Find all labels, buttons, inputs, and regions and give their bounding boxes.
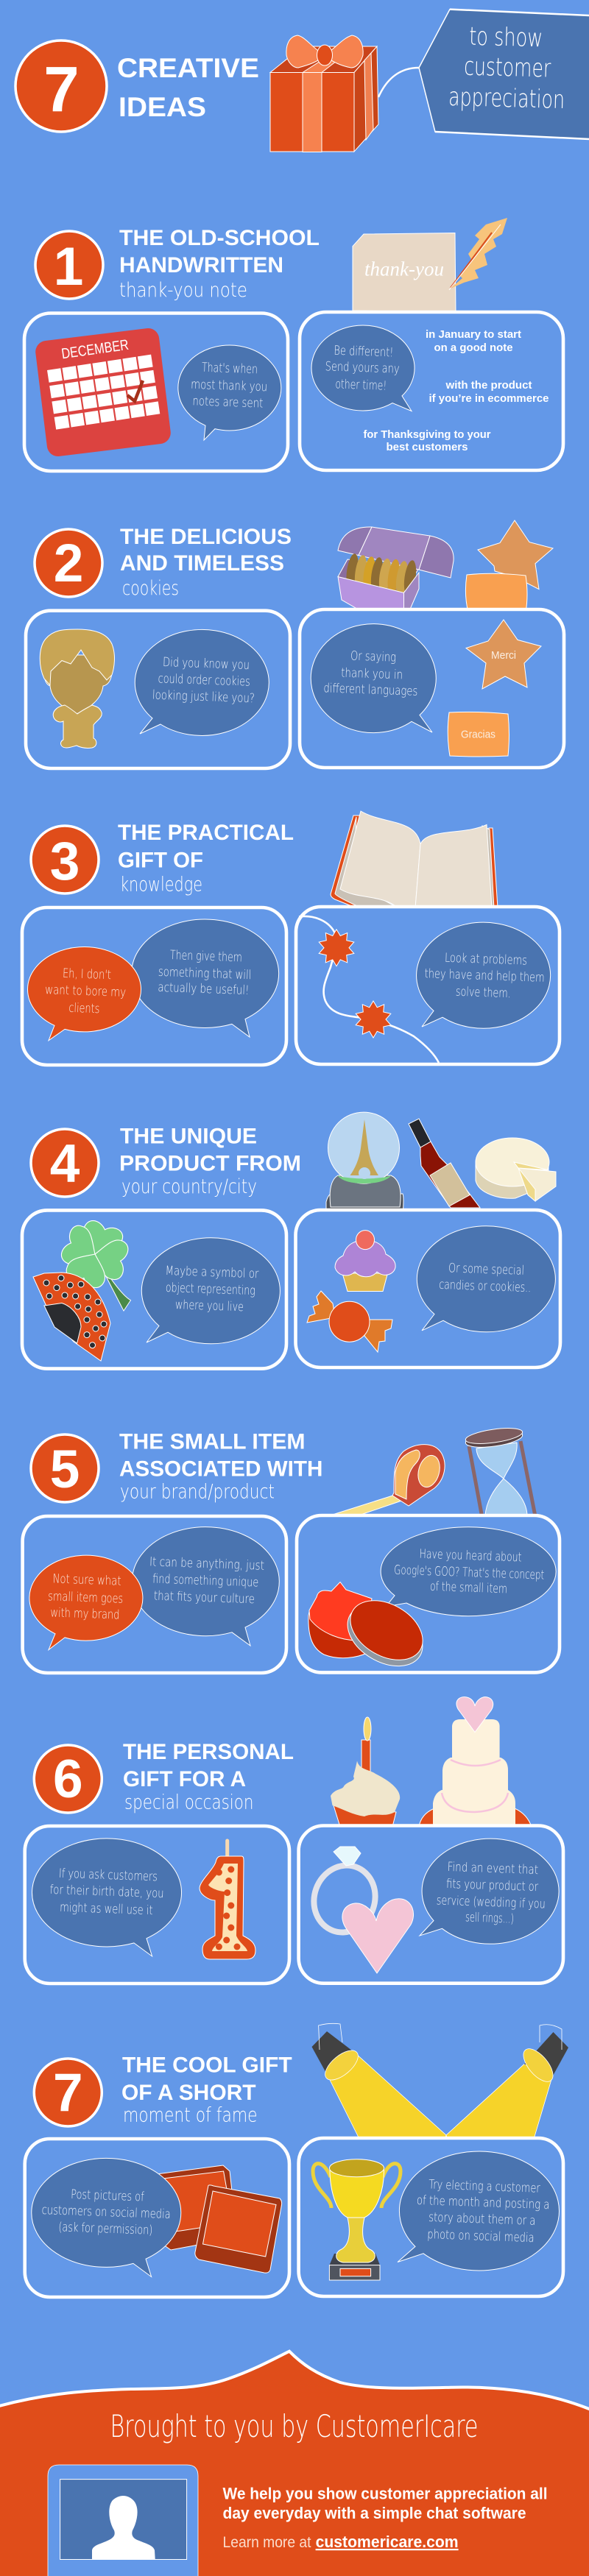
- panel: social media pictures: [25, 2139, 289, 2297]
- section 7: moment of fame: [25, 2023, 568, 2297]
- speech bubble: might as well use it: [60, 1900, 153, 1918]
- list of occasions: [364, 328, 549, 453]
- speech bubble: blue: [132, 919, 279, 1037]
- speech bubble: [417, 1226, 555, 1332]
- speech bubble: Or saying: [350, 648, 396, 665]
- speech bubble: [141, 1238, 280, 1344]
- icon: wine bottle: [409, 1119, 480, 1208]
- speech bubble: Look at problems: [445, 951, 527, 969]
- heading 1: THE OLD-SCHOOL: [119, 226, 320, 250]
- number badge 5: [31, 1434, 99, 1502]
- speech bubble: [420, 1839, 559, 1944]
- icon: birthday cupcake: [331, 1717, 400, 1827]
- section 6: personal gift: [25, 1697, 563, 1984]
- speech bubble: of the month and posting a: [417, 2193, 550, 2212]
- number badge 2: 2: [54, 534, 83, 593]
- heading 3: THE PRACTICAL: [118, 821, 294, 845]
- speech bubble: [311, 624, 436, 733]
- panel: customer of the month: [299, 2138, 563, 2296]
- tag: to show customer appreciation: to show: [469, 22, 543, 53]
- panel: small item: [23, 1516, 286, 1673]
- header number badge: [15, 40, 107, 132]
- speech bubble: candies or cookies..: [439, 1278, 532, 1295]
- icon: four-leaf clover: [58, 1217, 131, 1311]
- number badge 2: [35, 529, 102, 597]
- heading 2: [120, 525, 292, 600]
- path with milestones: [299, 916, 439, 1063]
- speech bubble: orange: Eh, I don't: [63, 966, 111, 983]
- icon: photo frames: [151, 2165, 282, 2273]
- heading 1: thank-you note: [119, 279, 247, 302]
- icon: person silhouette: [92, 2496, 155, 2559]
- speech bubble: fits your product or: [446, 1877, 538, 1894]
- speech bubble: Did you know you: [163, 655, 250, 673]
- speech bubble: Try electing a customer: [428, 2177, 540, 2196]
- speech bubble: orange: clients: [68, 1001, 100, 1016]
- panel: candies: [296, 1210, 560, 1367]
- panel: birth date: [25, 1826, 289, 1984]
- speech bubble: blue: [132, 1527, 279, 1646]
- speech bubble: other time!: [335, 377, 387, 394]
- section 5: small item: [23, 1426, 560, 1679]
- speech bubble: That's when: [202, 361, 258, 377]
- profile card: [48, 2465, 198, 2576]
- speech bubble: solve them.: [456, 985, 511, 1001]
- header number badge: 7: [43, 54, 80, 125]
- speech bubble: Find an event that: [447, 1860, 538, 1878]
- speech bubble: customers on social media: [41, 2203, 171, 2222]
- panel: other times to send: [300, 312, 563, 470]
- icon: star cookie: [478, 520, 553, 590]
- list of occasions: if you’re in ecommerce: [428, 392, 549, 405]
- speech bubble: of the small item: [430, 1579, 507, 1596]
- heading 5: your brand/product: [120, 1481, 275, 1504]
- number badge 5: 5: [50, 1440, 80, 1499]
- icon: wrapped candy: [307, 1291, 392, 1352]
- panel: google goo: [297, 1515, 560, 1679]
- speech bubble: orange: with my brand: [50, 1605, 120, 1623]
- number badge 1: [35, 231, 103, 299]
- icon: cheese: [476, 1138, 556, 1201]
- heading 6: [123, 1740, 294, 1814]
- speech bubble: [32, 1839, 182, 1956]
- icon: snow globe: [326, 1112, 403, 1214]
- call to action text: day everyday with a simple chat software: [222, 2504, 526, 2522]
- number badge 7: 7: [53, 2063, 83, 2123]
- icon: thank-you card: [353, 233, 456, 312]
- speech bubble: blue: actually be useful!: [158, 980, 250, 998]
- speech bubble: could order cookies: [158, 671, 250, 690]
- icon: calendar: DECEMBER: [60, 337, 130, 362]
- speech bubble: [381, 1527, 556, 1616]
- tag: to show customer appreciation: customer: [464, 52, 551, 84]
- heading 6: THE PERSONAL: [123, 1740, 294, 1764]
- speech bubble: blue: find something unique: [152, 1571, 258, 1590]
- speech bubble: photo on social media: [427, 2227, 535, 2246]
- icon: measuring tape: [333, 1445, 445, 1515]
- heading 7: THE COOL GIFT: [122, 2053, 292, 2078]
- speech bubble: [135, 629, 269, 735]
- speech bubble: Maybe a symbol or: [165, 1264, 259, 1281]
- icon: trophy: [313, 2159, 401, 2280]
- number badge 3: [31, 826, 99, 894]
- speech bubble: most thank you: [191, 378, 267, 394]
- call to action text: We help you show customer appreciation all: [222, 2485, 548, 2502]
- panel: special event: [299, 1825, 563, 1984]
- panel: local symbol: [22, 1210, 286, 1369]
- footer: [0, 2352, 589, 2576]
- main title: CREATIVE: [117, 53, 259, 83]
- section 3: knowledge: [22, 811, 560, 1065]
- section 2: cookies: [26, 520, 564, 768]
- heading 4: PRODUCT FROM: [119, 1152, 301, 1176]
- panel: cookies looking like you: [26, 611, 290, 768]
- speech bubble: thank you in: [341, 666, 403, 682]
- panel: bore my clients: [22, 907, 286, 1065]
- icon: boy cookie: [40, 629, 114, 748]
- icon: spanish fan: [33, 1273, 110, 1361]
- icon: number one candle: [200, 1841, 255, 1959]
- square: Gracias: [448, 712, 509, 757]
- heading 2: THE DELICIOUS: [120, 525, 292, 549]
- number badge 1: 1: [54, 237, 83, 297]
- speech bubble: they have and help them: [424, 966, 545, 986]
- heading 1: HANDWRITTEN: [119, 253, 283, 277]
- number badge 4: 4: [50, 1134, 80, 1194]
- panel: different languages: [300, 609, 564, 768]
- speech bubble: (ask for permission): [58, 2220, 153, 2238]
- list of occasions: on a good note: [434, 342, 512, 354]
- icon: spotlights: [312, 2023, 568, 2140]
- icon: red tin: [308, 1582, 434, 1679]
- speech bubble: Have you heard about: [419, 1547, 522, 1565]
- heading 4: [119, 1124, 301, 1198]
- speech bubble: orange: [29, 1555, 143, 1650]
- number badge 6: [34, 1745, 102, 1813]
- icon: diamond ring: [305, 1847, 384, 1941]
- heading 7: moment of fame: [123, 2103, 258, 2126]
- section 1: handwritten note: [24, 218, 563, 471]
- tag string: [378, 68, 419, 97]
- icon: calendar: [35, 327, 172, 458]
- icon: gift box: [270, 35, 378, 152]
- speech bubble: If you ask customers: [59, 1866, 158, 1884]
- panel: solve problems: [296, 907, 560, 1064]
- icon: cookie box: [338, 527, 454, 611]
- speech bubble: where you live: [175, 1298, 244, 1314]
- speech bubble: object representing: [166, 1281, 255, 1298]
- heading 3: [118, 821, 294, 896]
- speech bubble: looking just like you?: [152, 688, 255, 706]
- speech bubble: blue: something that will: [158, 965, 252, 983]
- speech bubble: story about them or a: [428, 2210, 536, 2229]
- main title: [117, 53, 259, 122]
- number badge 4: [31, 1129, 99, 1197]
- heading 7: OF A SHORT: [121, 2081, 256, 2105]
- speech bubble: [32, 2158, 181, 2277]
- icon: heart: [342, 1899, 414, 1973]
- number badge 7: [34, 2059, 102, 2126]
- speech bubble: [311, 325, 415, 411]
- list of occasions: best customers: [386, 441, 468, 453]
- speech bubble: Send yours any: [325, 359, 400, 377]
- speech bubble: orange: Not sure what: [52, 1571, 121, 1589]
- heading 5: THE SMALL ITEM: [119, 1430, 305, 1454]
- list of occasions: for Thanksgiving to your: [364, 428, 491, 441]
- speech bubble: blue: Then give them: [170, 948, 242, 965]
- speech bubble: orange: [27, 947, 141, 1041]
- icon: hourglass: [465, 1426, 535, 1516]
- speech bubble: different languages: [323, 681, 418, 699]
- heading 4: your country/city: [121, 1175, 257, 1198]
- speech bubble: service (wedding if you: [436, 1893, 546, 1912]
- speech bubble: sell rings...): [465, 1910, 514, 1927]
- heading 3: knowledge: [120, 874, 202, 896]
- heading 4: THE UNIQUE: [120, 1124, 257, 1148]
- speech bubble: blue: It can be anything, just: [149, 1554, 264, 1574]
- square: Gracias: Gracias: [461, 729, 495, 741]
- heading 6: GIFT FOR A: [123, 1767, 246, 1791]
- speech bubble: blue: that fits your culture: [154, 1589, 255, 1607]
- list of occasions: with the product: [445, 379, 532, 392]
- speech bubble: [417, 922, 551, 1028]
- heading 2: AND TIMELESS: [120, 551, 284, 576]
- number badge 6: 6: [53, 1749, 83, 1809]
- main title: IDEAS: [119, 92, 206, 122]
- tag: to show customer appreciation: [419, 10, 589, 139]
- speech bubble: orange: small item goes: [48, 1589, 123, 1607]
- call to action text: customericare.com: [316, 2533, 459, 2551]
- heading 5: ASSOCIATED WITH: [119, 1457, 322, 1481]
- icon: square cookie: [465, 573, 527, 612]
- icon: open book: [331, 811, 498, 910]
- panel: december calendar: [24, 314, 288, 471]
- heading 5: [119, 1430, 322, 1504]
- speech bubble: orange: want to bore my: [45, 983, 126, 1000]
- speech bubble: notes are sent: [192, 394, 264, 411]
- icon: cupcake: [335, 1231, 395, 1291]
- speech bubble: [178, 345, 281, 440]
- heading 3: GIFT OF: [118, 849, 203, 873]
- speech bubble: Be different!: [334, 344, 394, 360]
- main header: [15, 10, 589, 152]
- icon: feather: [449, 218, 507, 290]
- heading 6: special occasion: [124, 1791, 253, 1814]
- heading 2: cookies: [122, 577, 179, 600]
- heading 1: [119, 226, 320, 302]
- heading 7: [121, 2053, 292, 2126]
- star: Merci: Merci: [491, 649, 516, 662]
- icon: wedding cake: [419, 1697, 532, 1827]
- speech bubble: for their birth date, you: [49, 1883, 164, 1901]
- speech bubble: Post pictures of: [71, 2187, 144, 2204]
- list of occasions: in January to start: [426, 328, 521, 341]
- icon: thank-you card: thank-you: [364, 258, 444, 280]
- speech bubble: [398, 2151, 559, 2271]
- star: Merci: [466, 620, 541, 689]
- number badge 3: 3: [50, 832, 80, 891]
- speech bubble: Or some special: [448, 1261, 524, 1278]
- call to action text: [222, 2485, 548, 2551]
- call to action text: Learn more at: [222, 2534, 311, 2551]
- footer background with wave: [0, 2352, 589, 2576]
- section 4: unique product: [22, 1112, 560, 1369]
